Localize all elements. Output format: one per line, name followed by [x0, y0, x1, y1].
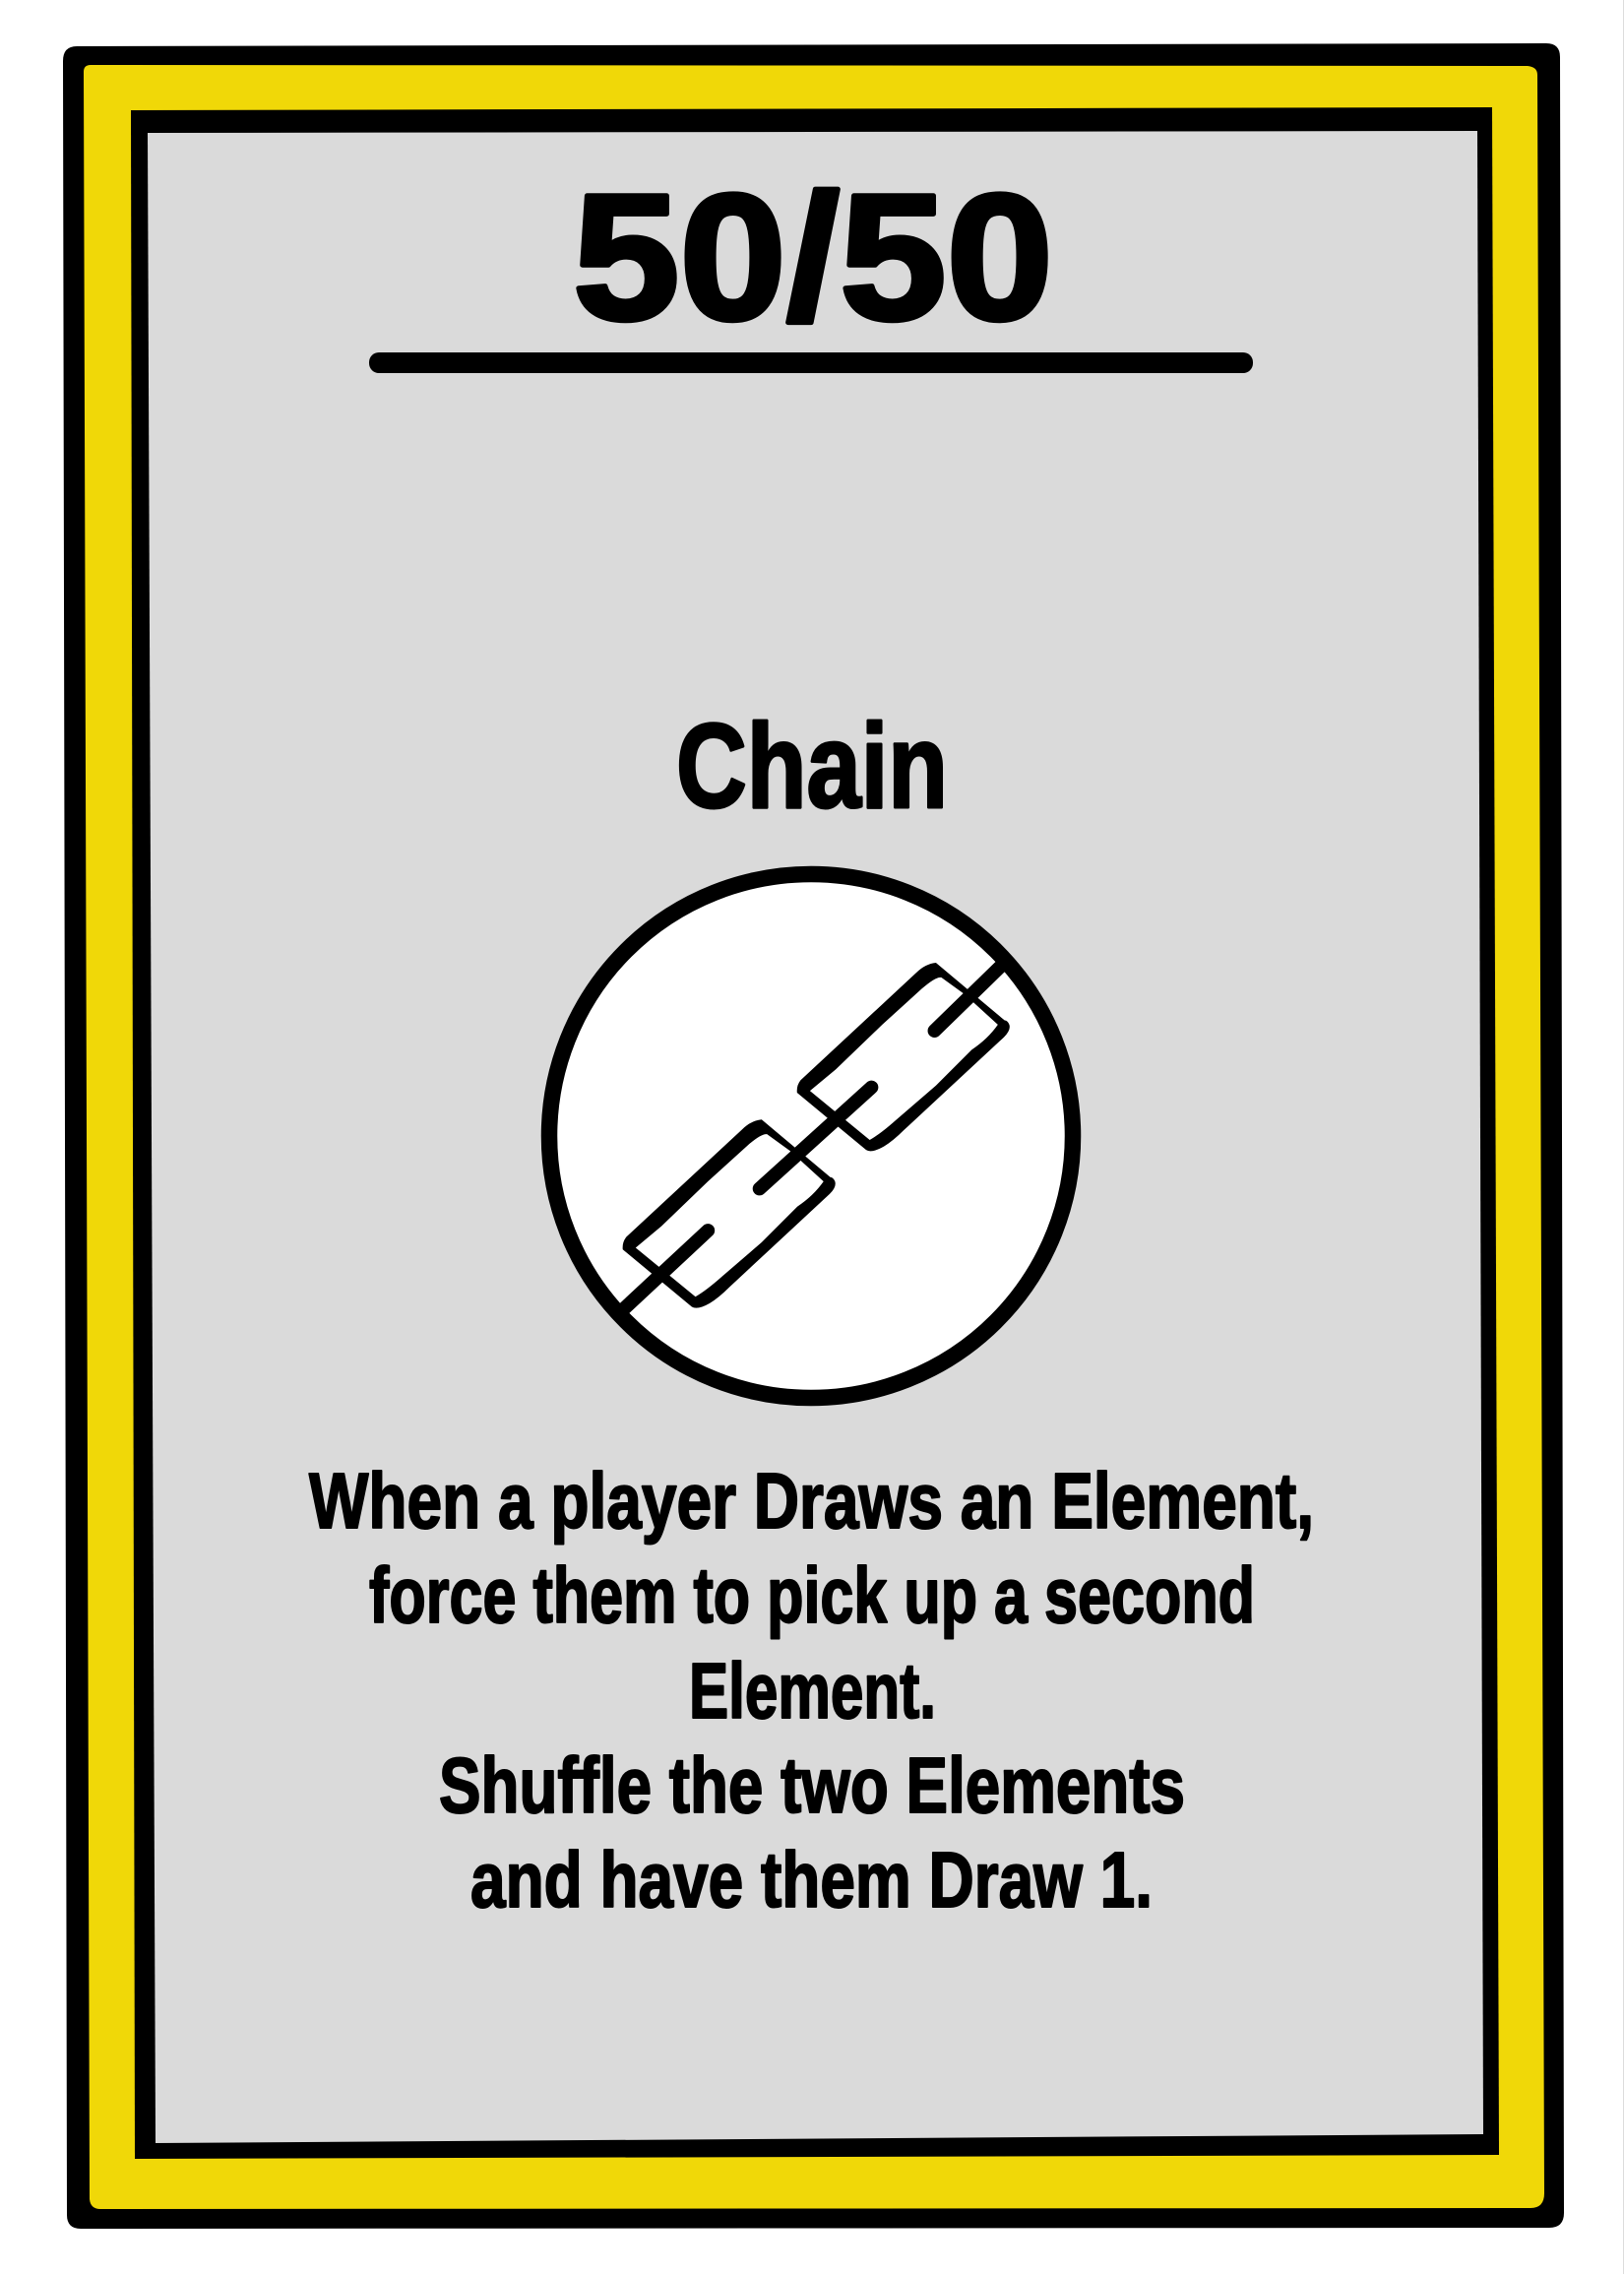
rule text: Shuffle the two Elements [439, 1741, 1185, 1829]
card name: Chain [676, 699, 948, 833]
inner black border [131, 107, 1499, 2159]
title: 50/50 [573, 157, 1053, 357]
title underline [369, 352, 1253, 373]
rule text: Element. [689, 1647, 936, 1735]
slash segments [619, 962, 1006, 1313]
rule text [309, 1457, 1314, 1924]
upper chain link [797, 963, 1010, 1151]
grey panel [148, 131, 1483, 2143]
circle [549, 874, 1073, 1398]
rule text: and have them Draw 1. [470, 1836, 1153, 1924]
rule text: force them to pick up a second [369, 1551, 1255, 1639]
icon: crossed-out chain [549, 874, 1073, 1398]
lower chain link [623, 1119, 836, 1308]
rule text: When a player Draws an Element, [309, 1457, 1314, 1545]
